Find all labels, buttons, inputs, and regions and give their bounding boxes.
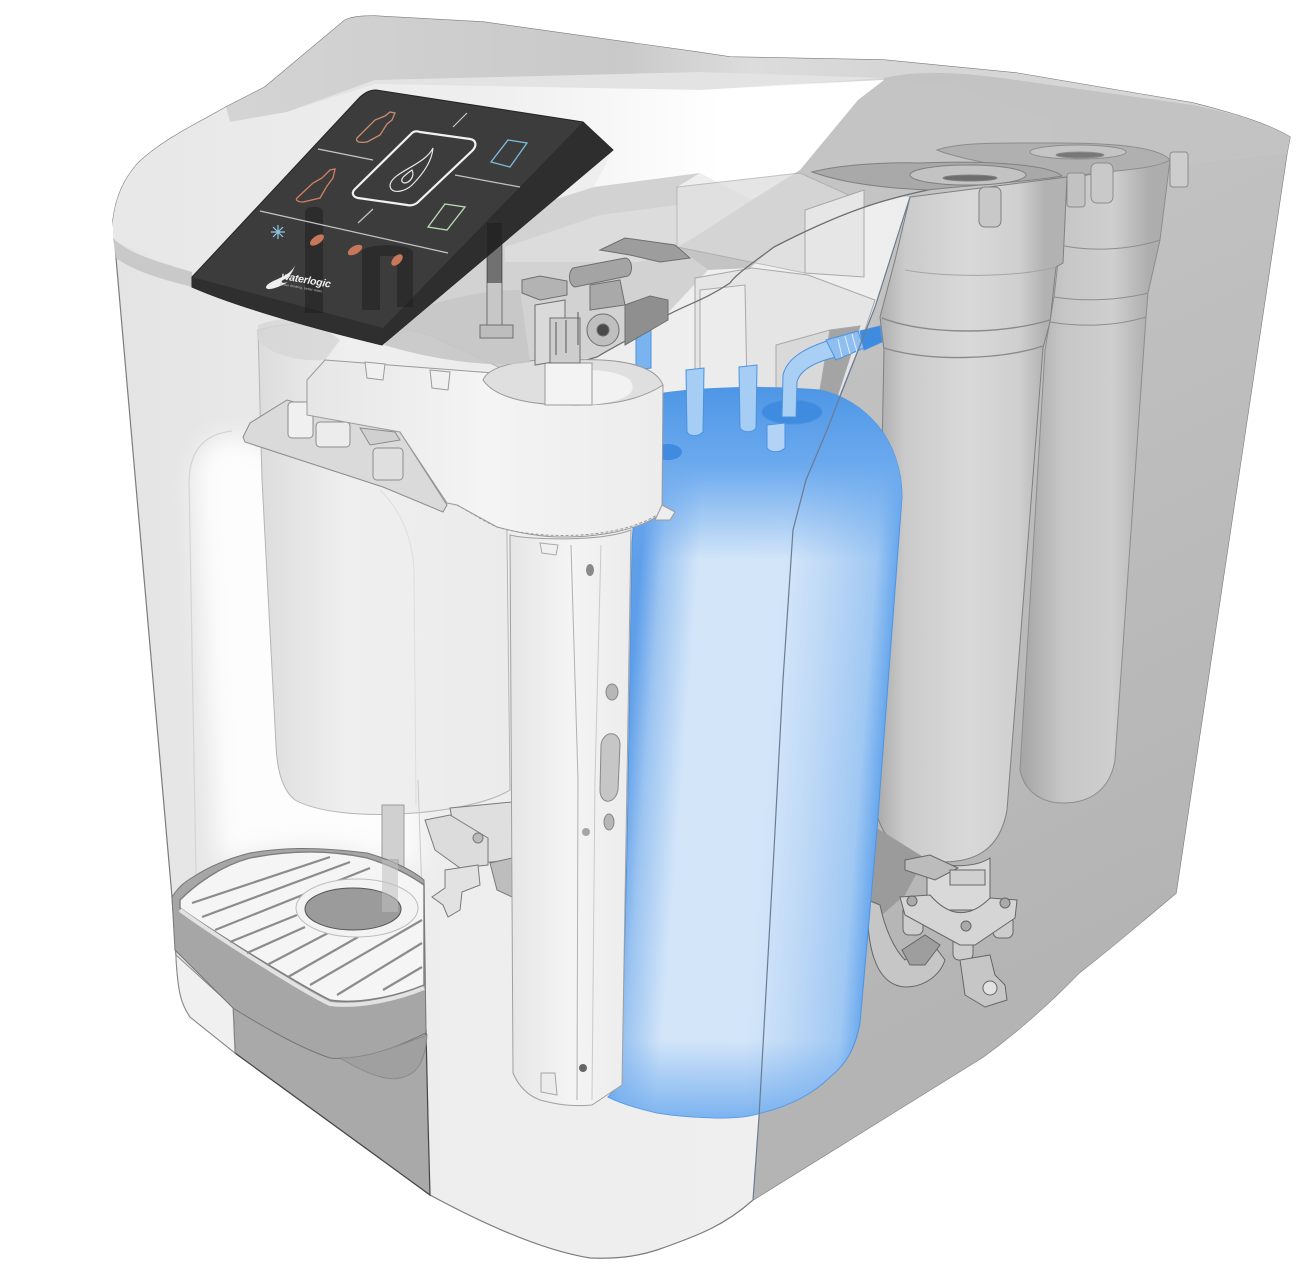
tower left edge — [418, 780, 428, 1120]
water tank blue — [608, 387, 902, 1118]
dark wedge behind lower valve — [868, 825, 925, 915]
filter cartridge: rear — [937, 143, 1188, 803]
icon: small bottles — [308, 232, 405, 268]
top roof band — [226, 16, 1290, 190]
upper valves and fittings — [480, 223, 690, 365]
divider lines — [260, 113, 520, 253]
right side dark shell — [753, 73, 1290, 1200]
reservoir tank — [258, 323, 510, 814]
glowing recess behind reservoir — [195, 436, 420, 870]
internal ledge — [387, 173, 708, 370]
icon: snowflake — [271, 225, 285, 239]
roof right grey section — [860, 73, 1290, 196]
recess inner arc — [380, 490, 416, 805]
grate bars — [192, 857, 422, 995]
translucent pipes through panel — [305, 207, 502, 313]
white lower left foot — [176, 955, 235, 1053]
reservoir lid bracket — [243, 400, 447, 512]
cover translucent strip — [677, 80, 1060, 270]
logo: waterlogic — [266, 265, 332, 294]
duct column — [510, 530, 631, 1106]
logo: waterlogic: better drinking. better water. — [280, 282, 323, 294]
under-cover bowl — [384, 290, 530, 364]
upper duct and collar — [307, 360, 675, 537]
side trim band — [113, 238, 192, 287]
icon: cold glass — [491, 140, 527, 167]
lower filter valve assembly — [868, 855, 1017, 1007]
base shadow block — [233, 1007, 430, 1195]
icon: water drop — [390, 148, 433, 191]
drain hole — [296, 879, 418, 937]
white window — [113, 80, 884, 275]
filter cartridge: front — [812, 162, 1067, 862]
logo: waterlogic: waterlogic — [280, 270, 332, 291]
reservoir top lens — [258, 319, 340, 360]
recess outline — [189, 431, 232, 875]
dispensing spout pipes — [382, 805, 404, 900]
lower centre valve — [425, 802, 512, 917]
icon: bottle small — [296, 169, 335, 202]
cover front line — [753, 197, 910, 1200]
rear translucent boxes — [677, 173, 875, 425]
internal upper ledge shadow — [505, 205, 677, 262]
control panel — [192, 90, 613, 345]
cover edge curve — [387, 177, 1060, 370]
icon: ambient glass — [428, 204, 465, 230]
tank ports and bent pipe — [636, 323, 882, 460]
rear bracket outline — [910, 105, 1038, 150]
drip tray — [172, 848, 427, 1079]
icon: bottle large — [357, 112, 395, 142]
centre selection rectangle — [353, 131, 475, 205]
roof inner light highlight — [287, 72, 884, 112]
